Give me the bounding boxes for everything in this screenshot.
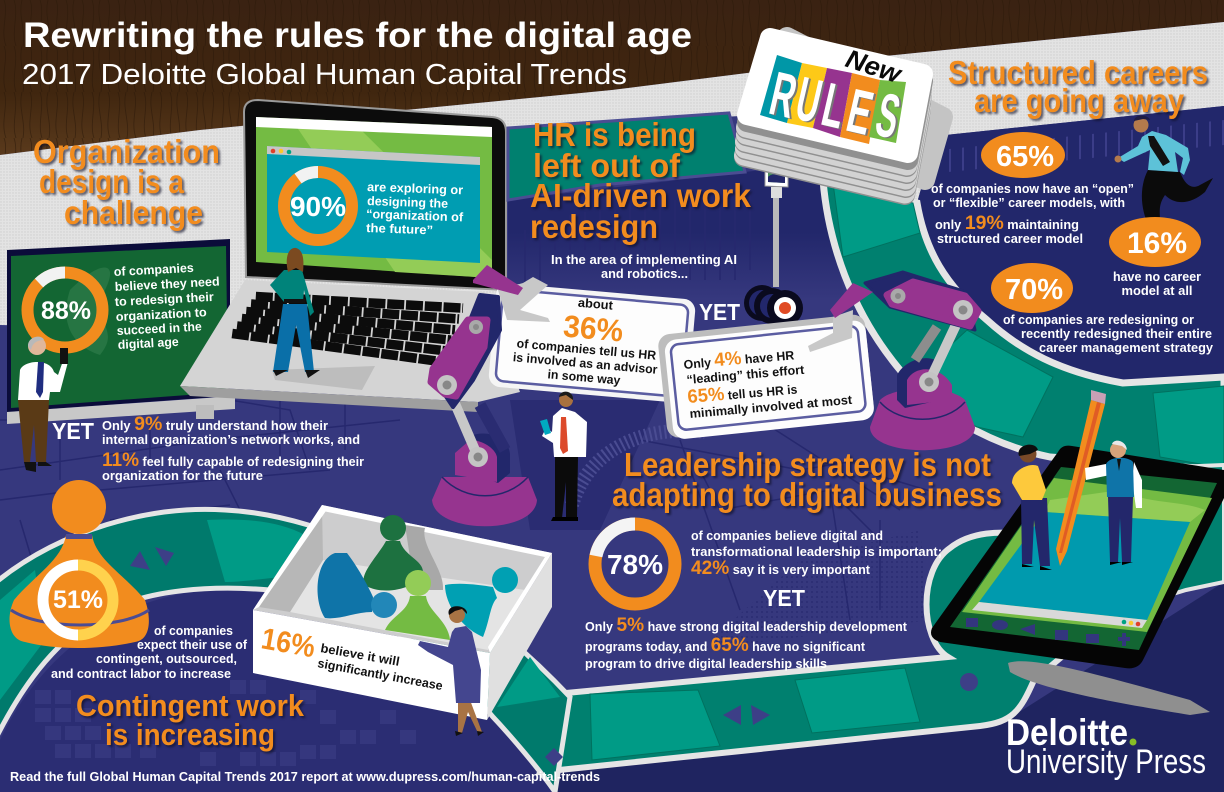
copy: leadership programs: [585, 615, 908, 671]
callout card copy: 65% tell us HR is: [687, 377, 798, 408]
board track: bottom: [540, 533, 1130, 772]
donut: 90%: [284, 172, 352, 240]
callout card: 36 percent: 36%: [562, 309, 625, 349]
pawn: lime: [385, 570, 450, 640]
copy: no career model: [1113, 270, 1201, 298]
callout card: 36 percent: [488, 282, 696, 404]
sign stand: [7, 396, 235, 424]
New script: New: [842, 43, 906, 90]
board token: triangles: [723, 705, 770, 725]
background: rail arc: [572, 431, 705, 505]
copy: leadership programs: program to drive digital leadership skills: [585, 657, 827, 671]
tile: [915, 330, 1053, 437]
copy: open or flexible: [931, 182, 1134, 246]
donut: 78%: 78%: [607, 549, 663, 580]
tablet: [931, 390, 1224, 668]
copy: contingent labor: and contract labor to increase: [51, 667, 231, 681]
background: HR panel navy shading: [508, 165, 845, 300]
background: light grey board band: [0, 22, 1224, 330]
stylus: [1008, 661, 1210, 715]
heading: leadership strategy: [612, 446, 1002, 513]
sign copy: of companies: [113, 261, 194, 279]
background: wood header: [0, 0, 1224, 155]
robot base: [870, 389, 975, 450]
RULES lettering: [764, 59, 906, 152]
RULES lettering: L: [816, 70, 852, 142]
figure: running man: [1114, 116, 1213, 228]
box copy: believe it will: [319, 641, 401, 669]
robot gripper: [808, 310, 853, 352]
figure: man with phone: [18, 337, 68, 472]
pill: 16%: [1109, 217, 1201, 267]
background: halftone shading: [700, 530, 930, 650]
heading: contingent work: is increasing: [105, 717, 275, 752]
background: right panel fence: [940, 120, 1224, 172]
figure: woman at box: [418, 606, 484, 736]
target wheels: [744, 285, 803, 326]
RULES lettering: S: [870, 80, 906, 152]
box interior: [253, 505, 552, 653]
pole with badge: [773, 195, 779, 287]
copy: leadership importance: transformational leadership is important;: [691, 545, 942, 559]
robot links: [915, 327, 937, 360]
heading: leadership strategy: adapting to digital business: [612, 476, 1002, 513]
copy: open or flexible: of companies now have an “open”: [931, 182, 1134, 196]
RULES lettering: U: [790, 64, 828, 137]
heading: organization design: design is a: [39, 163, 185, 200]
laptop: 90%: [290, 191, 346, 222]
stat panel: structured careers: 16%: [1127, 227, 1187, 260]
copy: leadership importance: [691, 529, 942, 579]
laptop copy: “organization of: [366, 207, 464, 224]
heading: organization design: Organization: [33, 133, 220, 170]
sign copy: to redesign their: [114, 290, 214, 309]
HR intro copy: In the area of implementing AI: [551, 253, 737, 267]
tile: [1153, 386, 1224, 468]
background: tile grid lower left: [35, 680, 416, 766]
board track: left arc: [0, 509, 570, 792]
copy: leadership programs: Only 5% have strong digital leadership development: [585, 615, 908, 636]
stacked card edges: [744, 45, 923, 195]
RULES lettering: R: [764, 59, 803, 132]
robot body: [445, 295, 500, 407]
copy: leadership importance: of companies believe digital and: [691, 529, 883, 543]
copy: redesigning: of companies are redesigning or: [1003, 313, 1194, 327]
pill: 70%: [991, 263, 1073, 313]
stat panel: structured careers: 70%: [1005, 274, 1063, 306]
laptop copy: are exploring or: [367, 180, 463, 197]
heading: HR left out: left out of: [533, 147, 681, 184]
robot base: [432, 477, 537, 526]
heading: organization design: challenge: [64, 194, 203, 231]
callout card: 4 percent: [657, 314, 875, 441]
heading: leadership strategy: Leadership strategy is not: [624, 446, 991, 483]
tablet body: [931, 446, 1224, 668]
copy: organization network: 11% feel fully capable of redesigning their: [102, 450, 364, 471]
stat panel: structured careers: [931, 132, 1213, 355]
heading: HR left out: AI-driven work: [530, 177, 752, 214]
sign: 88 percent: [7, 239, 235, 424]
callout card: 36 percent: in some way: [547, 367, 621, 388]
sign copy: succeed in the: [116, 320, 202, 338]
laptop base: [180, 280, 520, 402]
top card: [747, 38, 923, 153]
box walls: [253, 505, 328, 610]
heading: structured careers: are going away: [974, 82, 1185, 119]
heading: HR left out: redesign: [530, 208, 658, 245]
callout card copy: [683, 343, 853, 421]
pencil: [1056, 400, 1105, 566]
laptop lid: [244, 100, 506, 290]
YET: organization: YET: [52, 418, 94, 444]
sign copy: [113, 261, 220, 352]
browser window: [267, 146, 480, 263]
box copy: 16%: 16%: [259, 622, 318, 664]
heading: HR left out: HR is being: [533, 116, 696, 153]
laptop copy: designing the: [367, 194, 448, 211]
pawn: dark green: [364, 515, 423, 591]
copy: contingent labor: of companies: [154, 624, 233, 638]
copy: redesigning: recently redesigned their entire: [1021, 327, 1212, 341]
title: Rewriting the rules for the digital age: [23, 16, 692, 55]
background: right panel dotted texture: [1130, 235, 1224, 370]
copy: no career model: model at all: [1122, 284, 1192, 298]
footer link text: Read the full Global Human Capital Trends 2017 report at www.dupress.com/human-capital-trends: [10, 770, 600, 784]
card stack: New Rules: [744, 37, 943, 326]
stat panel: structured careers: 65%: [996, 141, 1054, 173]
heading: HR left out: [508, 113, 752, 245]
YET: leadership: YET: [763, 585, 805, 611]
heading: contingent work: Contingent work: [76, 688, 305, 723]
copy: redesigning: [1003, 313, 1213, 355]
background: map street lines: [0, 190, 960, 620]
HR panel tile: [508, 113, 745, 200]
tile: [833, 183, 920, 257]
robot body: [865, 272, 975, 330]
subtitle: 2017 Deloitte Global Human Capital Trends: [22, 59, 627, 91]
copy: leadership importance: 42% say it is very important: [691, 558, 871, 579]
pill: 65%: [981, 132, 1065, 178]
pawn: blue: [318, 553, 397, 618]
callout card copy: “leading” this effort: [686, 363, 806, 387]
copy: leadership programs: programs today, and 65% have no significant: [585, 635, 866, 656]
board token: square: [545, 748, 563, 766]
copy: contingent labor: expect their use of: [137, 638, 248, 652]
logo: Deloitte University Press: [1006, 712, 1206, 781]
pawn: 51 percent: [10, 480, 149, 648]
heading: organization design: [33, 133, 220, 231]
tablet inner teal: [979, 512, 1190, 620]
pawn: 51 percent: 51%: [53, 586, 103, 614]
copy: contingent labor: [51, 624, 248, 681]
figure: woman in yellow: [1012, 445, 1052, 570]
copy: contingent labor: contingent, outsourced,: [96, 652, 237, 666]
figure: man in vest: [1085, 441, 1142, 565]
tablet toolbar icons: [966, 618, 1130, 646]
copy: open or flexible: only 19% maintaining: [935, 213, 1079, 234]
donut: 78%: [595, 524, 675, 604]
board token: round: [960, 673, 978, 691]
laptop screen: [256, 117, 492, 278]
background: right navy panel: [917, 106, 1224, 383]
tablet screen: [950, 467, 1217, 650]
laptop keyboard: [232, 296, 463, 362]
back card: [765, 37, 943, 180]
board track: right of tablet: [1100, 465, 1224, 610]
board track: upper right: [823, 180, 1224, 470]
laptop copy: the future”: [366, 221, 433, 237]
title: [22, 16, 692, 91]
callout card: 36 percent: is involved as an advisor: [512, 350, 658, 377]
pawn shadow: [405, 525, 443, 590]
HR intro copy: and robotics...: [601, 267, 688, 281]
box back rim: [322, 505, 552, 557]
callout card: 36 percent: about: [577, 296, 614, 313]
RULES tiles: [760, 55, 906, 144]
copy: redesigning: career management strategy: [1039, 341, 1213, 355]
copy: open or flexible: structured career model: [937, 232, 1083, 246]
copy: no career model: have no career: [1113, 270, 1201, 284]
laptop copy: [366, 180, 464, 237]
callout card: 36 percent: of companies tell us HR: [516, 336, 657, 363]
figure: man with phone center: [540, 392, 587, 521]
robot arm: left: [431, 265, 550, 526]
heading: structured careers: [948, 54, 1208, 119]
HR intro copy: [551, 253, 737, 281]
RULES lettering: E: [841, 76, 879, 149]
background: bottom right navy: [540, 582, 1224, 792]
sign copy: believe they need: [114, 275, 220, 294]
sign: 88 percent: 88%: [41, 297, 91, 325]
sign copy: organization to: [115, 305, 207, 324]
box of pawns: [253, 505, 552, 720]
board token: triangles left: [130, 547, 174, 570]
YET: HR: YET: [699, 299, 740, 325]
copy: organization network: Only 9% truly understand how their: [102, 414, 328, 435]
background: wood grain: [0, 0, 1224, 155]
sign copy: digital age: [117, 335, 179, 352]
copy: organization network: organization for the future: [102, 469, 263, 483]
background: dark patch behind center figure: [510, 400, 660, 530]
figure: woman on laptop: [270, 248, 320, 378]
donut: 51%: [43, 565, 113, 635]
background: dark lower-left field: [0, 590, 555, 792]
laptop: [180, 100, 520, 412]
copy: open or flexible: or “flexible” career models, with: [933, 196, 1125, 210]
callout card copy: minimally involved at most: [689, 393, 853, 421]
pawn: teal: [445, 567, 518, 637]
copy: organization network: internal organization’s network works, and: [102, 433, 360, 447]
box copy: significantly increase: [316, 656, 444, 693]
robot links: [480, 405, 505, 450]
robot gripper: [498, 277, 550, 322]
copy: organization network: [102, 414, 364, 483]
logo: Deloitte University Press: Deloitte: [1006, 712, 1128, 753]
donut: 88%: [28, 272, 102, 348]
laptop trackpad: [272, 366, 375, 390]
callout card copy: Only 4% have HR: [683, 343, 795, 374]
robot arm: right: [808, 272, 978, 450]
heading: contingent work: [76, 688, 305, 752]
